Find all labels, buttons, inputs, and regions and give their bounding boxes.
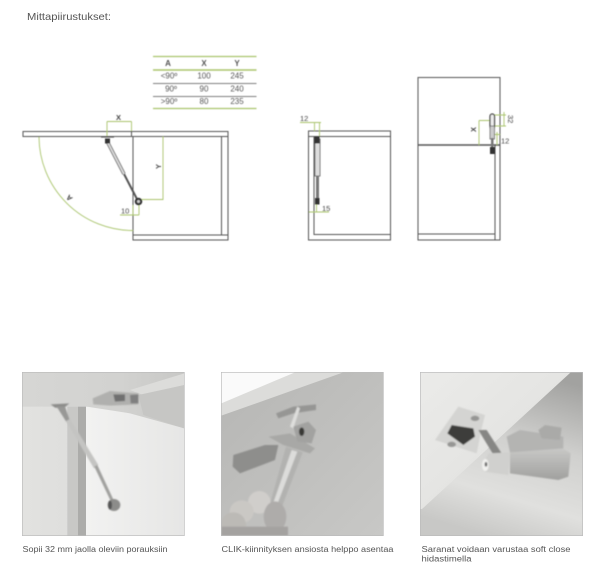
dimension labels: [64, 113, 163, 216]
table: dimensions by opening angle: 90: [200, 84, 209, 94]
table: dimensions by opening angle: A: [165, 59, 171, 68]
table: dimensions by opening angle: <90º: [161, 72, 177, 80]
hinge: [93, 391, 138, 406]
photo: hinge with soft close damper: [420, 372, 583, 536]
table: dimensions by opening angle: [153, 56, 256, 108]
gas strut: [490, 114, 495, 154]
green dimension lines: [39, 122, 163, 230]
photo: click fastening by hand: [221, 372, 383, 538]
table: dimensions by opening angle: >90º: [161, 97, 177, 106]
dimension labels: A: [64, 192, 74, 203]
cabinet and flap outline: [23, 132, 228, 240]
green dimension lines: [300, 122, 329, 212]
gas strut: [265, 447, 303, 525]
hand: [248, 491, 271, 514]
caption: second photo: CLIK-kiinnityksen ansiosta helppo asentaa: [222, 545, 394, 554]
hinge arm: [478, 430, 502, 456]
table: dimensions by opening angle: 235: [230, 97, 244, 106]
gas strut: [51, 403, 120, 511]
bright edge of cabinet: [221, 372, 343, 416]
table: dimensions by opening angle: 90º: [165, 84, 177, 94]
caption: first photo: Sopii 32 mm jaolla oleviin porauksiin: [22, 545, 168, 554]
dimension labels: 12: [501, 136, 509, 146]
gas strut: [101, 137, 142, 205]
gas strut: [314, 136, 320, 204]
shelf underside: [22, 372, 184, 428]
dimension labels: [469, 115, 515, 146]
cabinet outline: [308, 131, 390, 240]
dimension labels: 12: [300, 114, 308, 123]
hinge: [233, 445, 278, 473]
caption: third photo: Saranat voidaan varustaa soft close: [422, 545, 571, 554]
dimension labels: 10: [121, 206, 129, 216]
mounting plate: [435, 407, 485, 453]
dimension labels: Y: [154, 164, 163, 169]
dimension labels: X: [116, 113, 121, 122]
drawing: side view with open flap: [23, 113, 228, 240]
dimension labels: X: [469, 127, 478, 132]
table: dimensions by opening angle: X: [201, 59, 207, 68]
damper cup: [510, 448, 571, 480]
drawing: front view of cabinet: [300, 114, 390, 240]
table: dimensions by opening angle: 245: [230, 72, 244, 80]
dimension labels: 32: [506, 115, 515, 123]
title: Mittapiirustukset:: [27, 11, 111, 23]
upper bracket: [276, 404, 316, 418]
green dimension lines: [479, 112, 506, 145]
table: dimensions by opening angle: 240: [230, 84, 244, 94]
cabinet side edge: [67, 407, 78, 536]
dimension labels: [300, 114, 330, 213]
photo: gas strut mounted in cabinet: [22, 372, 184, 536]
cabinet outline: [418, 78, 500, 240]
table: dimensions by opening angle: Y: [234, 59, 240, 68]
table: dimensions by opening angle: 100: [197, 72, 211, 80]
table: dimensions by opening angle: 80: [200, 97, 209, 106]
drawing: front view with flap and mounting: [418, 78, 515, 240]
caption: third photo: hidastimella: [422, 554, 472, 564]
dimension labels: 15: [322, 204, 330, 213]
